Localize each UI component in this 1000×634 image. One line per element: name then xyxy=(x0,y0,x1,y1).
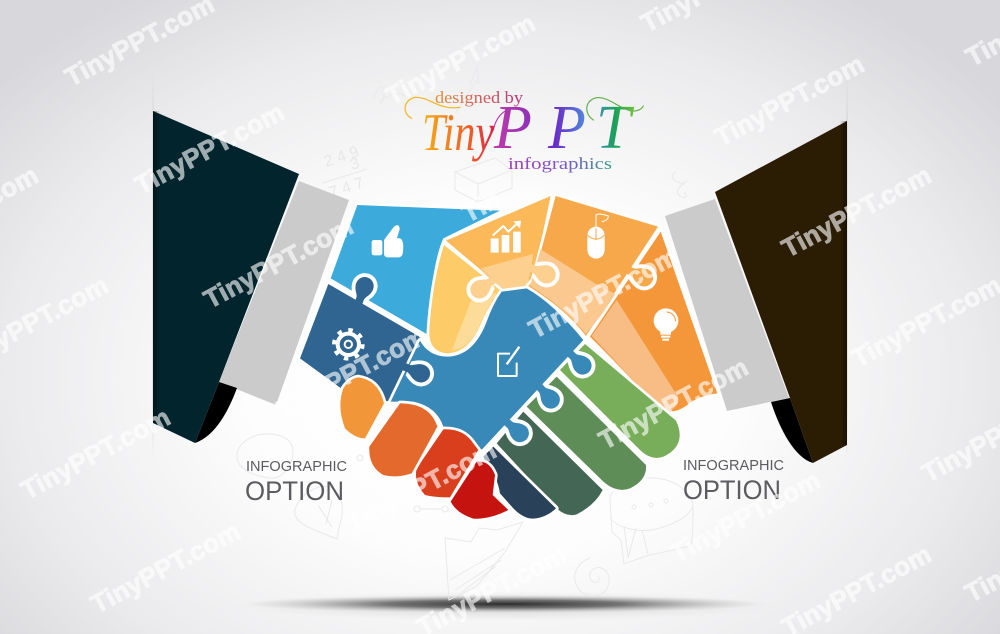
watermarks: TinyPPT.com xyxy=(666,465,825,568)
watermarks: TinyPPT.com xyxy=(594,352,753,455)
left label xyxy=(245,458,347,506)
watermarks: Tin xyxy=(457,183,506,228)
watermarks: TinyPPT.com xyxy=(524,241,683,344)
watermarks: TinyPPT.com xyxy=(130,97,289,200)
doodle: multiplication sum: 7 4 7 xyxy=(327,175,366,202)
left cuff xyxy=(219,181,349,405)
logo text: PPT: T xyxy=(596,94,635,162)
finger: red orange xyxy=(416,429,478,497)
watermarks: TinyPPT.com xyxy=(86,516,245,619)
background doodles xyxy=(237,67,693,600)
icon: bar chart xyxy=(491,221,521,253)
yellow lighter facet xyxy=(452,293,497,351)
left label line 1: INFOGRAPHIC xyxy=(246,458,347,475)
right label xyxy=(683,457,784,505)
panel: mouse orange xyxy=(528,196,658,336)
finger: light green xyxy=(560,344,680,458)
mouse lighter facet xyxy=(530,249,617,334)
icon: notepad and pencil xyxy=(498,347,519,376)
logo text: PPT xyxy=(493,94,635,162)
panel: gear dark blue xyxy=(300,284,421,402)
watermarks: TinyPPT.com xyxy=(199,211,358,314)
right sleeve xyxy=(665,121,847,463)
logo flourishes xyxy=(405,97,643,130)
logo text: Tiny: Tiny xyxy=(422,104,494,162)
finger: navy xyxy=(483,447,556,519)
right cuff xyxy=(665,199,789,411)
right inner lining xyxy=(771,398,813,463)
icon: thumbs up xyxy=(372,225,403,257)
right jacket xyxy=(715,121,847,463)
panel: centre blue palm xyxy=(391,288,583,452)
gold lighter facet xyxy=(481,254,533,289)
watermarks: TinyPPT.com xyxy=(777,160,936,263)
finger: orange xyxy=(369,403,437,476)
panel: yellow thumb xyxy=(429,245,501,353)
watermarks: TinyPPT.com xyxy=(710,49,869,152)
watermarks: TinyPPT.com xyxy=(381,8,540,111)
floor shadow xyxy=(235,591,775,621)
finger: dark green xyxy=(497,412,603,515)
puzzle knobs xyxy=(349,259,656,446)
panel: thumbs-up light blue xyxy=(331,205,500,334)
left jacket xyxy=(153,111,299,443)
logo: designed by TinyPPT infographics xyxy=(405,88,643,173)
logo text: infographics: infographics xyxy=(508,154,612,173)
logo text: designed by: designed by xyxy=(435,88,524,107)
doodle: multiplication sum: 3 xyxy=(348,155,362,174)
right label line 1: INFOGRAPHIC xyxy=(683,457,784,474)
icon: mouse xyxy=(587,214,608,259)
doodle: multiplication sum xyxy=(322,144,366,202)
panel: bulb orange xyxy=(590,232,717,412)
left inner lining xyxy=(195,382,237,443)
bulb lighter facet xyxy=(592,300,678,411)
finger: mid green xyxy=(527,377,646,490)
logo text: PPT: P xyxy=(547,94,586,162)
panel: gold chart xyxy=(446,196,551,290)
finger: red xyxy=(451,461,508,519)
wall edge shadows xyxy=(152,70,848,460)
right label line 2: OPTION xyxy=(683,475,781,505)
watermarks: TinyPPT.com xyxy=(16,402,175,505)
left sleeve xyxy=(153,111,349,443)
handshake puzzle xyxy=(300,196,717,519)
logo text: PPT: P xyxy=(493,94,532,162)
left label line 2: OPTION xyxy=(245,476,344,506)
doodle: multiplication sum: 2 4 9 xyxy=(322,144,361,171)
watermarks: TinyPPT.com xyxy=(272,321,431,424)
watermarks: TinyPPT.com xyxy=(342,435,501,538)
icon: light bulb xyxy=(654,308,678,341)
icon: gear xyxy=(334,330,363,359)
finger: light orange xyxy=(340,377,384,438)
